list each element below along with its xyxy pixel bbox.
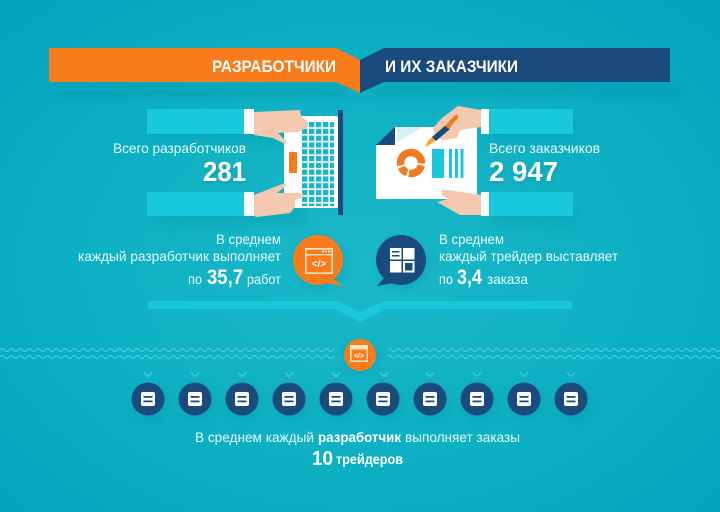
trader average text: по [439,271,453,287]
bottom summary text: 10 [312,448,333,470]
developer average text: 35,7 [207,266,243,289]
wave separator right [388,347,720,353]
bottom summary text: разработчик [318,429,402,445]
wave separator right lower [388,354,720,360]
banner left: orange: РАЗРАБОТЧИКИ [212,58,336,76]
trader average text: 3,4 [457,266,482,289]
icon: orange speech bubble with code window: </> [312,259,326,270]
developer average text: работ [247,271,282,287]
total customers: 2 947 [489,156,558,187]
icon: small orange code badge [344,339,377,374]
illustration: hands on laptop [147,109,343,225]
header banner [49,48,680,96]
total developers: Всего разработчиков [113,140,246,156]
banner right: navy [360,48,670,93]
total developers: 281 [203,156,246,187]
total customers [489,140,600,187]
wave separator left lower [0,354,335,360]
developer average text: по [188,271,202,287]
developer average text: каждый разработчик выполняет [78,248,282,264]
row of trader icons [132,372,590,420]
developer average text [78,231,282,289]
trader average text: В среднем [439,231,504,247]
trader average text [439,231,619,289]
banner right: navy: И ИХ ЗАКАЗЧИКИ [385,58,518,76]
bottom summary text [195,429,520,470]
developer average text: В среднем [216,231,281,247]
icon: small orange code badge: </> [354,353,364,360]
total developers [113,140,246,187]
bottom summary text: В среднем каждый [195,429,314,445]
divider arrow [148,301,572,322]
bottom summary text: выполняет заказы [405,429,520,445]
trader average text: заказа [487,271,528,287]
illustration: document with hands [376,106,575,225]
icon: navy speech bubble with grid [376,235,428,289]
total customers: Всего заказчиков [489,140,600,156]
trader average text: каждый трейдер выставляет [439,248,619,264]
bottom summary text: трейдеров [336,451,403,467]
banner left: orange [49,48,360,93]
wave separator left [0,347,335,353]
icon: orange speech bubble with code window [293,235,345,289]
